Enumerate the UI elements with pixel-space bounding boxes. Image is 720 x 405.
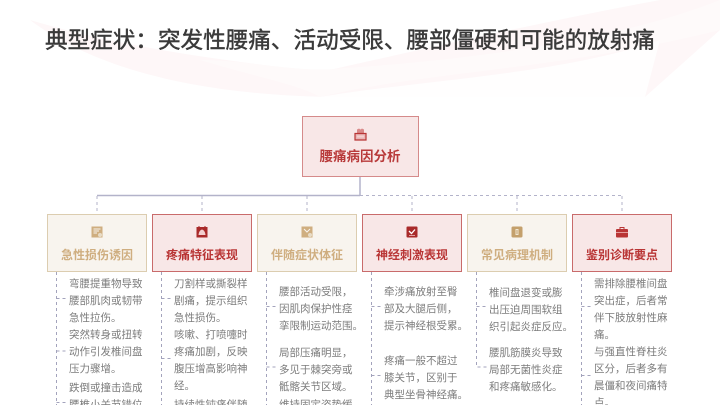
card title: 鉴别诊断要点: [586, 248, 658, 262]
background swoosh: [0, 0, 720, 100]
list: 疼痛特征表现: [174, 278, 248, 405]
text block: 咳嗽、打喷嚏时 疼痛加剧，反映 腹压增高影响神 经。: [174, 329, 248, 392]
text block: 腰肌筋膜炎导致 局部无菌性炎症 和疼痛敏感化。: [489, 346, 562, 392]
card title: 疼痛特征表现: [166, 248, 238, 262]
list: 鉴别诊断要点: [594, 278, 668, 405]
card: 疼痛特征表现: [152, 214, 252, 272]
list: 急性损伤诱因: [69, 278, 142, 405]
text block: 局部压痛明显， 多见于棘突旁或 骶髂关节区域。: [279, 346, 352, 392]
text block: 突然转身或扭转 动作引发椎间盘 压力骤增。: [69, 329, 142, 375]
text block: 疼痛一般不超过 膝关节，区别于 典型坐骨神经痛。: [384, 354, 468, 400]
card title: 神经刺激表现: [376, 248, 448, 262]
card title: 常见病理机制: [481, 248, 553, 262]
card: 伴随症状体征: [257, 214, 357, 272]
list: 伴随症状体征: [279, 286, 363, 405]
icon: calendar alert: [196, 226, 208, 238]
text block: 牵涉痛放射至臀 部及大腿后侧， 提示神经根受累。: [384, 286, 468, 332]
text block: 需排除腰椎间盘 突出症，后者常 伴下肢放射性麻 痛。: [594, 278, 668, 340]
icon: root: [354, 128, 367, 141]
icon: badge: [512, 226, 522, 238]
text block: 弯腰提重物导致 腰部肌肉或韧带 急性拉伤。: [69, 278, 142, 324]
card: 神经刺激表现: [362, 214, 462, 272]
list: 神经刺激表现: [384, 286, 468, 400]
icon: briefcase: [616, 227, 628, 238]
card title: 伴随症状体征: [271, 248, 343, 262]
card: 常见病理机制: [467, 214, 567, 272]
root label: 腰痛病因分析: [320, 148, 400, 164]
icon: check box: [406, 226, 418, 238]
root box: 腰痛病因分析: [302, 116, 418, 177]
text block: 腰部活动受限， 因肌肉保护性痉 挛限制运动范围。: [279, 286, 363, 332]
text block: 刀割样或撕裂样 剧痛，提示组织 急性损伤。: [174, 278, 248, 324]
card: 急性损伤诱因: [47, 214, 147, 272]
icon: document: [92, 226, 102, 238]
icon: checklist: [302, 226, 312, 238]
title: 典型症状：突发性腰痛、活动受限、腰部僵硬和可能的放射痛: [45, 28, 655, 53]
card title: 急性损伤诱因: [61, 248, 133, 262]
text block: 椎间盘退变或膨 出压迫周围软组 织引起炎症反应。: [489, 286, 573, 332]
card: 鉴别诊断要点: [572, 214, 672, 272]
list: 常见病理机制: [489, 286, 573, 392]
